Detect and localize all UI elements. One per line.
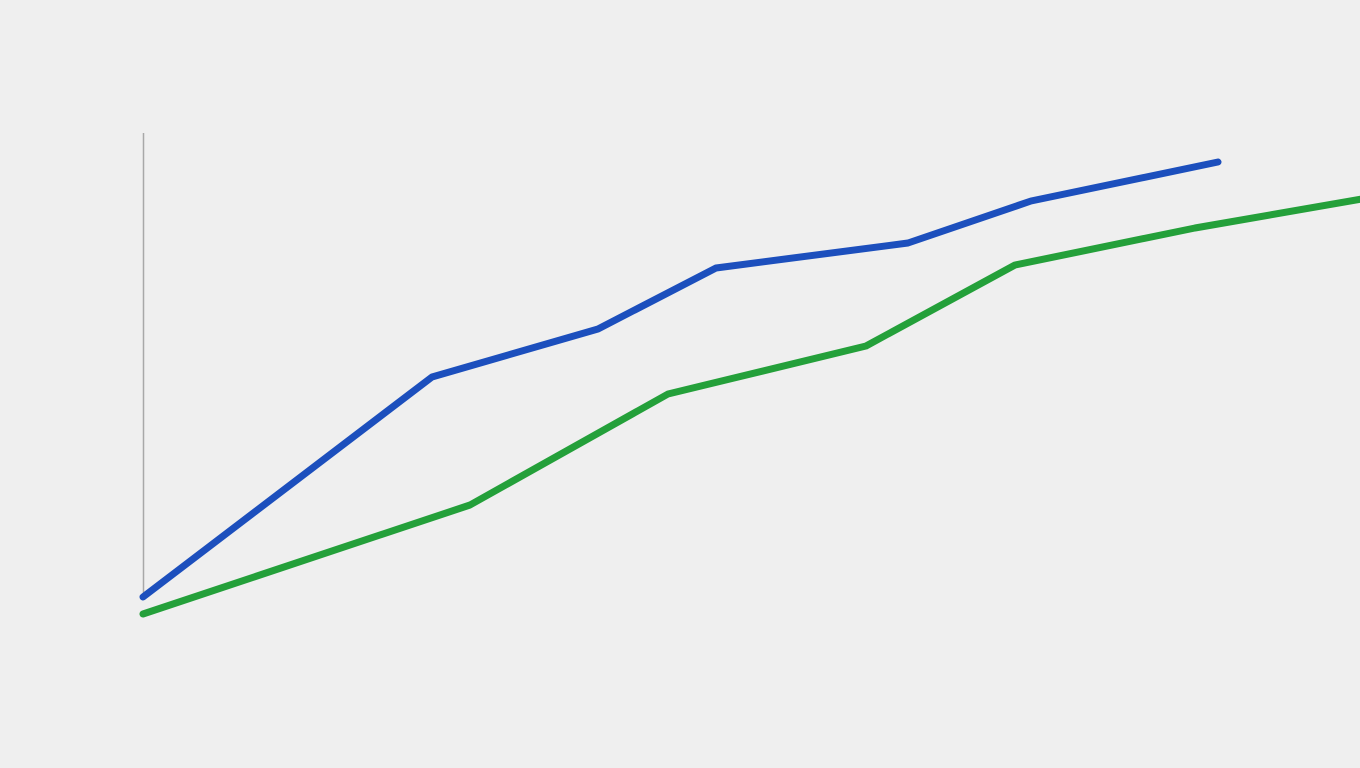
series: green line	[143, 199, 1360, 614]
y axis	[142, 133, 144, 600]
series: blue line	[143, 162, 1218, 597]
